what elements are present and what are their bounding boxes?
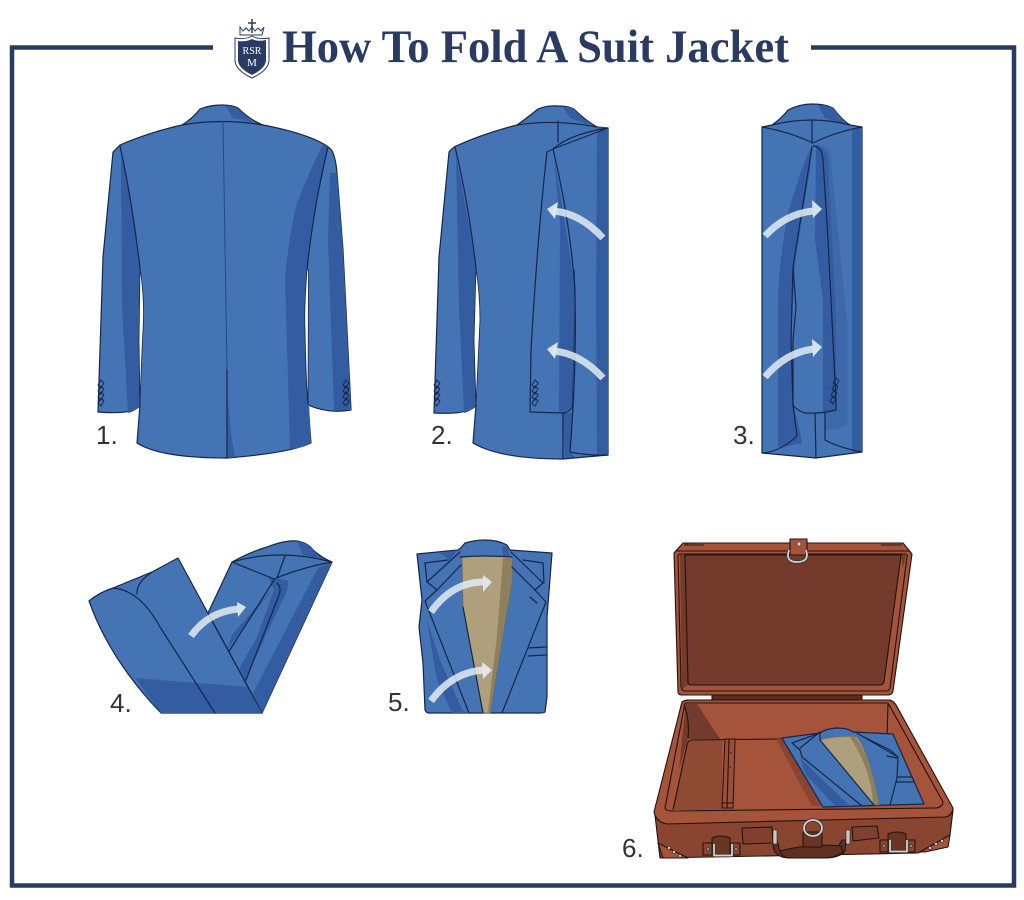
suitcase [654, 539, 953, 858]
step number 1: 1. [96, 420, 118, 450]
logo shield: RSR [243, 46, 262, 57]
right corner protector [920, 835, 950, 852]
front hardware [658, 820, 950, 858]
logo shield [235, 19, 269, 78]
left buckle [703, 836, 740, 856]
left strap pad [742, 827, 773, 844]
step number 6: 6. [622, 833, 644, 863]
title: How To Fold A Suit Jacket [282, 21, 789, 73]
suitcase lid [674, 539, 912, 702]
handle ring [803, 820, 822, 847]
logo shield: M [247, 57, 257, 69]
step number 3: 3. [733, 420, 755, 450]
folded jacket in suitcase [782, 728, 924, 807]
jacket step 1 [98, 105, 351, 458]
jacket step 2 [434, 106, 608, 459]
right strap pad [852, 826, 879, 841]
belt [722, 739, 735, 808]
right buckle [880, 832, 915, 852]
jacket step 4 [89, 541, 332, 713]
lid strap and ring [788, 539, 807, 562]
jacket step 5 [417, 540, 552, 713]
step number 5: 5. [388, 687, 410, 717]
step number 4: 4. [110, 688, 132, 718]
handle [773, 839, 846, 858]
left corner protector [658, 843, 688, 858]
step number 2: 2. [431, 420, 453, 450]
jacket step 3 [762, 104, 862, 458]
suitcase base [654, 700, 953, 858]
